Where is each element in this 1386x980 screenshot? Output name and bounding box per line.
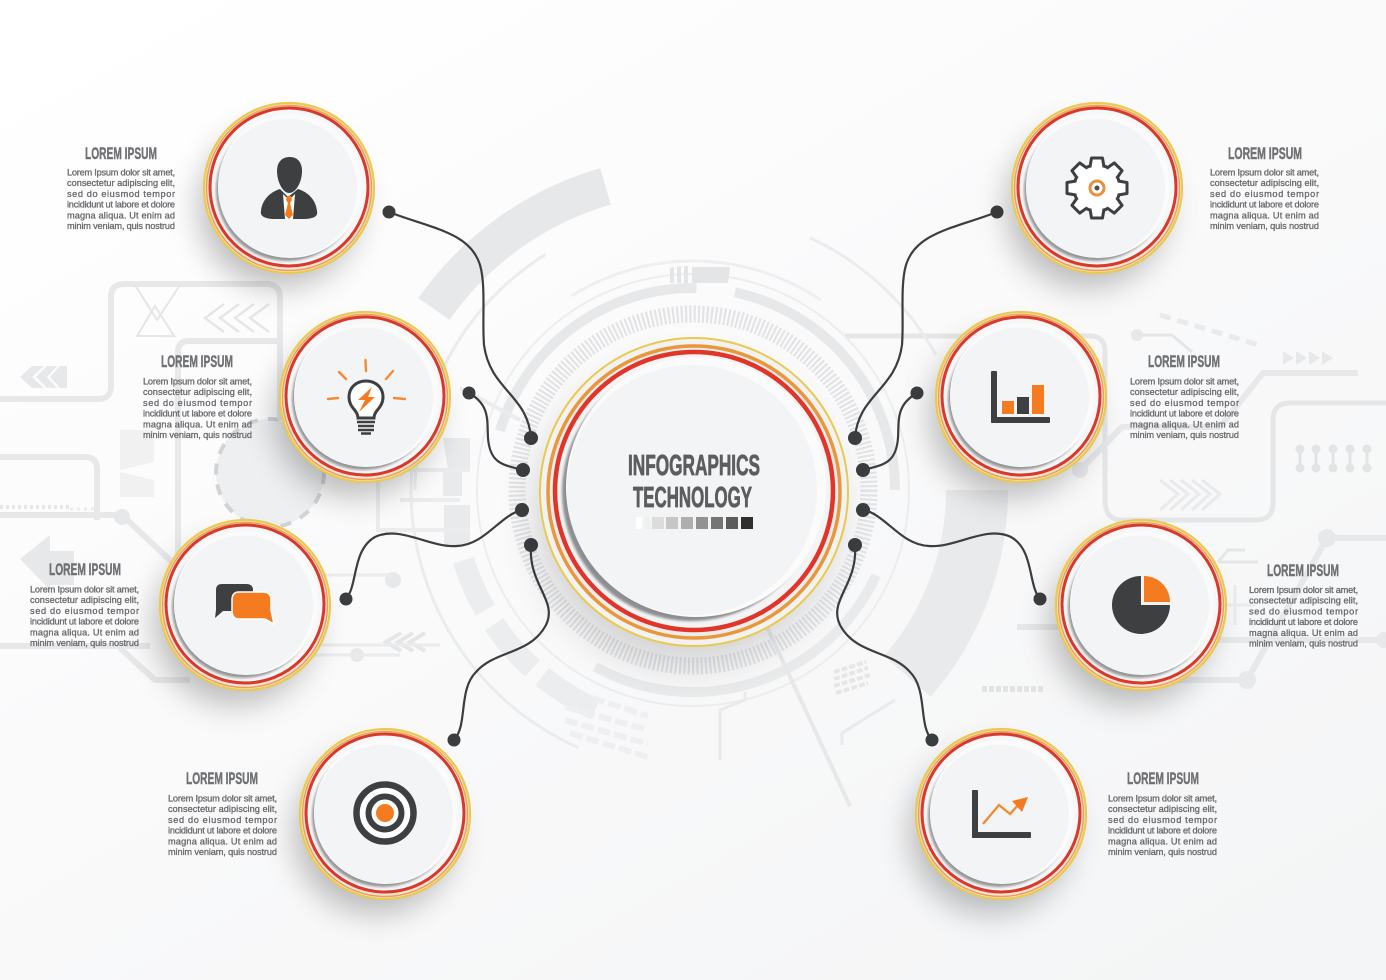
text block: second left: Lorem Ipsum dolor sit amet, <box>143 376 252 386</box>
node: bar chart <box>931 312 1106 496</box>
icon: speech bubbles <box>215 584 274 624</box>
central circle <box>536 338 848 664</box>
text block: third left: LOREM IPSUM <box>49 561 121 579</box>
text block: bottom right: sed do eiusmod tempor <box>1108 815 1217 825</box>
text block: bottom right: incididunt ut labore et dolore <box>1108 826 1217 836</box>
icon: pie chart <box>1112 576 1170 634</box>
text block: third right: Lorem Ipsum dolor sit amet, <box>1249 585 1358 595</box>
background circuit: right <box>845 315 1386 689</box>
text block: top left: LOREM IPSUM <box>85 145 157 163</box>
text block: top right <box>1210 145 1319 231</box>
text block: second left: magna aliqua. Ut enim ad <box>143 419 252 429</box>
text block: bottom right: consectetur adipiscing elit, <box>1108 804 1217 814</box>
text block: top right: LOREM IPSUM <box>1228 145 1302 163</box>
central title: TECHNOLOGY <box>633 482 752 514</box>
text block: top left: magna aliqua. Ut enim ad <box>67 210 175 220</box>
text block: third right: consectetur adipiscing elit, <box>1249 596 1358 606</box>
central gradient swatches <box>636 517 753 529</box>
node: chat <box>155 520 330 704</box>
text block: top left: sed do eiusmod tempor <box>67 189 175 199</box>
connector lines <box>346 212 1040 740</box>
text block: third right: magna aliqua. Ut enim ad <box>1249 628 1358 638</box>
icon: bar chart <box>991 371 1050 423</box>
text block: bottom left: minim veniam, quis nostrud <box>168 847 277 857</box>
text block: bottom right: Lorem Ipsum dolor sit amet, <box>1108 794 1217 804</box>
text block: third left: magna aliqua. Ut enim ad <box>30 627 139 637</box>
text block: second left: incididunt ut labore et dolore <box>143 409 252 419</box>
text block: second right: LOREM IPSUM <box>1148 353 1220 371</box>
text block: top right: incididunt ut labore et dolore <box>1210 200 1319 210</box>
text block: second right: Lorem Ipsum dolor sit amet, <box>1130 376 1239 386</box>
text block: bottom right: minim veniam, quis nostrud <box>1108 847 1217 857</box>
text block: second right: incididunt ut labore et dolore <box>1130 409 1239 419</box>
text block: third left: consectetur adipiscing elit, <box>30 595 139 605</box>
text block: second right: sed do eiusmod tempor <box>1130 398 1239 408</box>
text block: second right <box>1130 353 1239 440</box>
node: line chart <box>911 729 1086 913</box>
text block: second left: consectetur adipiscing elit, <box>143 387 252 397</box>
text block: third right <box>1249 562 1358 648</box>
text block: second left <box>143 353 252 440</box>
central title: INFOGRAPHICS <box>628 450 760 482</box>
text block: top left: incididunt ut labore et dolore <box>67 200 175 210</box>
text block: bottom left <box>168 770 277 857</box>
text block: second right: consectetur adipiscing elit, <box>1130 387 1239 397</box>
background circuit: left <box>0 284 440 680</box>
text block: bottom right <box>1108 770 1217 857</box>
text block: third right: sed do eiusmod tempor <box>1249 606 1358 616</box>
text block: second right: magna aliqua. Ut enim ad <box>1130 419 1239 429</box>
text block: bottom left: sed do eiusmod tempor <box>168 815 277 825</box>
text block: bottom right: LOREM IPSUM <box>1127 770 1199 788</box>
text block: third left <box>30 561 139 648</box>
text block: third left: incididunt ut labore et dolore <box>30 617 139 627</box>
icon: light bulb <box>328 360 405 434</box>
text block: second right: minim veniam, quis nostrud <box>1130 430 1239 440</box>
text block: top left: consectetur adipiscing elit, <box>67 178 175 188</box>
text block: bottom left: LOREM IPSUM <box>186 770 258 788</box>
text block: top right: minim veniam, quis nostrud <box>1210 221 1319 231</box>
node: person <box>199 103 374 287</box>
text block: bottom left: magna aliqua. Ut enim ad <box>168 836 277 846</box>
text block: third right: minim veniam, quis nostrud <box>1249 638 1358 648</box>
text block: bottom left: incididunt ut labore et dolore <box>168 826 277 836</box>
text block: bottom left: Lorem Ipsum dolor sit amet, <box>168 794 277 804</box>
text block: third right: incididunt ut labore et dolore <box>1249 617 1358 627</box>
text block: top left <box>67 145 175 231</box>
text block: second left: minim veniam, quis nostrud <box>143 430 252 440</box>
text block: third left: minim veniam, quis nostrud <box>30 638 139 648</box>
central title <box>628 450 760 514</box>
text block: top right: consectetur adipiscing elit, <box>1210 178 1319 188</box>
text block: third left: Lorem Ipsum dolor sit amet, <box>30 584 139 594</box>
text block: bottom right: magna aliqua. Ut enim ad <box>1108 836 1217 846</box>
node: gear <box>1007 103 1182 287</box>
text block: bottom left: consectetur adipiscing elit, <box>168 804 277 814</box>
node: pie chart <box>1051 520 1226 704</box>
connector dots <box>340 206 1046 746</box>
text block: third left: sed do eiusmod tempor <box>30 606 139 616</box>
text block: top right: sed do eiusmod tempor <box>1210 189 1319 199</box>
text block: second left: LOREM IPSUM <box>161 353 233 371</box>
text block: top right: Lorem Ipsum dolor sit amet, <box>1210 168 1319 178</box>
node: target <box>295 729 470 913</box>
text block: top right: magna aliqua. Ut enim ad <box>1210 210 1319 220</box>
icon: businessman <box>261 157 317 219</box>
text block: top left: Lorem Ipsum dolor sit amet, <box>67 168 175 178</box>
icon: gear <box>1067 158 1127 218</box>
text block: second left: sed do eiusmod tempor <box>143 398 252 408</box>
icon: target <box>356 784 414 842</box>
node: bulb <box>275 312 450 496</box>
icon: line chart <box>972 790 1031 838</box>
text block: third right: LOREM IPSUM <box>1267 562 1339 580</box>
text block: top left: minim veniam, quis nostrud <box>67 221 175 231</box>
background concentric tech rings <box>377 174 1009 806</box>
